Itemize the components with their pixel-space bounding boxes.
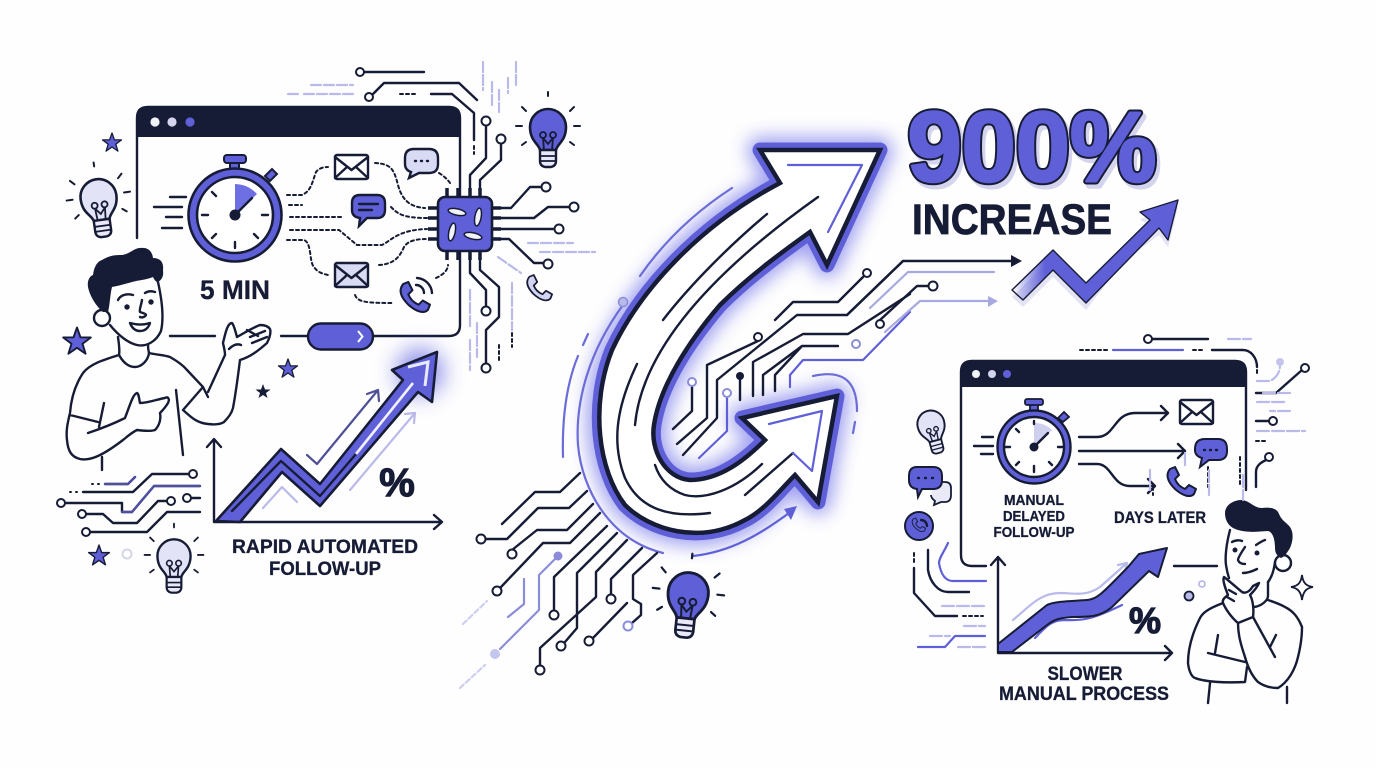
icon: phone ringing — [401, 278, 432, 312]
label: 5 min: 5 MIN — [200, 275, 270, 305]
icon: phone indigo — [1168, 467, 1196, 496]
inner circuit traces — [673, 261, 910, 458]
icon: stopwatch manual — [974, 399, 1070, 484]
icon: speech bubble indigo — [352, 195, 385, 226]
title: rapid automated follow-up: FOLLOW-UP — [269, 558, 381, 580]
figure: smiling man presenting — [67, 248, 270, 470]
icon: lightbulb center bottom — [648, 550, 728, 641]
icon: star middle left — [63, 327, 91, 354]
label: days later: DAYS LATER — [1114, 508, 1206, 527]
icon: lightbulb light tilted — [914, 407, 952, 457]
slow growth chart — [991, 548, 1172, 660]
icon: AI chip — [428, 188, 501, 260]
icon: small dark star — [256, 384, 270, 398]
panel: rapid automated follow-up — [57, 62, 595, 593]
icon: star bottom left — [89, 545, 109, 565]
icon: speech bubble light — [405, 149, 438, 178]
icon: lightbulb bottom left — [145, 524, 203, 593]
icon: lightbulb left — [62, 158, 136, 241]
browser window: manual — [961, 361, 1246, 566]
icon: stopwatch 5 min — [154, 155, 282, 262]
icon: phone light — [527, 275, 552, 300]
figure: thoughtful man — [1174, 500, 1302, 703]
title: rapid automated follow-up: RAPID AUTOMATED — [232, 536, 418, 558]
icon: phone badge — [905, 512, 933, 540]
title: slower manual process: MANUAL PROCESS — [999, 684, 1169, 705]
icon: star top left — [102, 133, 122, 151]
lower left circuit traces — [57, 470, 200, 536]
label: manual delayed follow-up: FOLLOW-UP — [994, 524, 1074, 541]
percent symbol: % — [379, 461, 415, 505]
icon: star by hand — [278, 359, 298, 377]
arrow body — [599, 150, 880, 533]
title: rapid automated follow-up — [232, 536, 418, 580]
icon: envelope light — [335, 263, 368, 287]
900 percent number: 900% — [908, 91, 1156, 202]
panel: slower manual process — [905, 335, 1313, 705]
percent symbol: % — [1129, 600, 1161, 641]
title: slower manual process: SLOWER — [1048, 664, 1123, 685]
central U-turn arrow — [460, 150, 1022, 688]
icon: envelope outline — [1180, 400, 1213, 424]
icon: bubble indigo — [1195, 439, 1227, 467]
label: manual delayed follow-up: MANUAL — [1004, 492, 1064, 509]
label: manual delayed follow-up — [994, 492, 1074, 541]
lower-left circuit traces — [460, 473, 657, 688]
dashed message routes — [287, 163, 450, 303]
900 percent number: 900% — [910, 95, 1160, 206]
icon: chat bubbles — [909, 467, 951, 505]
900 percent number: 900% — [908, 91, 1156, 202]
increase word: INCREASE — [912, 196, 1112, 244]
icon: lightbulb top right — [516, 92, 580, 167]
pill button — [308, 324, 373, 350]
thought bubbles — [1184, 581, 1205, 600]
circuit traces around chip — [288, 62, 595, 372]
increase arrow — [1012, 200, 1178, 310]
browser window: automation — [137, 107, 460, 336]
label: manual delayed follow-up: DELAYED — [1003, 508, 1065, 525]
icon: sparkle — [1291, 575, 1313, 600]
title: slower manual process — [999, 664, 1169, 705]
arrows to channels — [1079, 406, 1185, 493]
icon: envelope — [335, 155, 368, 179]
small ring — [122, 550, 132, 558]
rapid growth chart — [207, 348, 444, 529]
arrow glow — [599, 150, 880, 533]
headline: 900% increase — [908, 91, 1178, 310]
motion lines around arrow — [563, 188, 857, 556]
outgoing traces and arrows to 900% — [847, 255, 1022, 332]
right panel circuit traces — [914, 335, 1309, 647]
